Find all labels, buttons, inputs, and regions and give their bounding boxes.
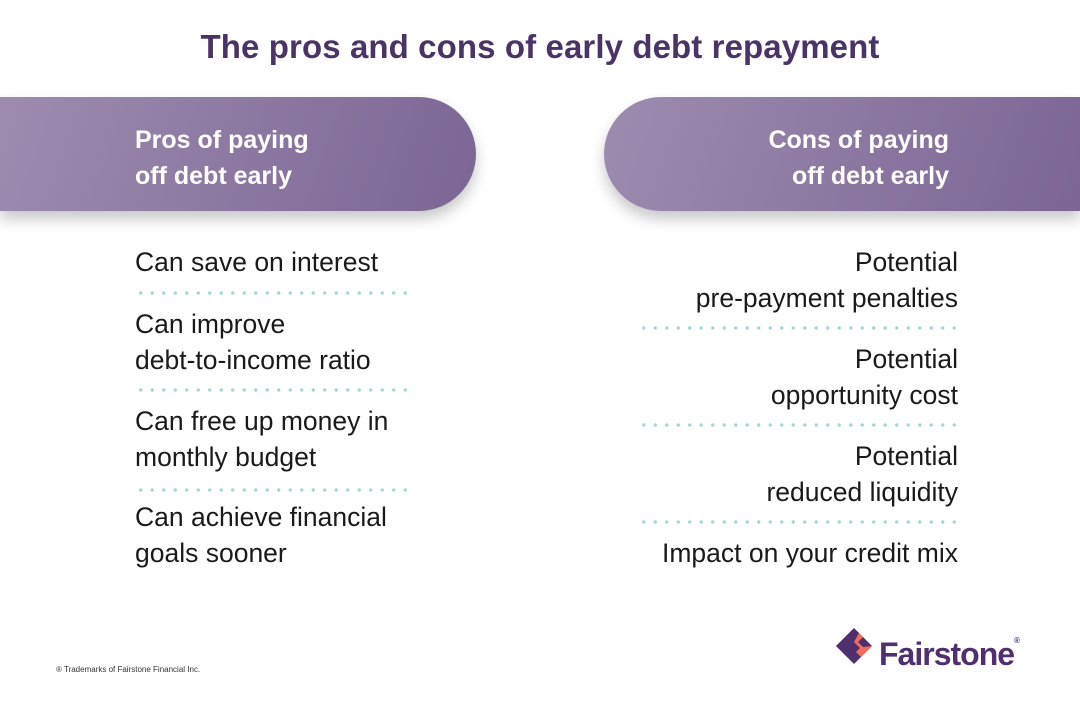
banner: cons: Cons of paying	[768, 126, 949, 154]
pro item 2: Can improve	[135, 309, 285, 339]
icon: diamond	[836, 628, 872, 664]
con item 3: Potential	[855, 441, 958, 471]
con item 1	[696, 247, 958, 313]
con item 2: Potential	[855, 344, 958, 374]
banner: pros: off debt early	[135, 162, 292, 190]
pro item 3: monthly budget	[135, 442, 316, 472]
panel: pros list	[135, 247, 407, 568]
con item 4: Impact on your credit mix	[662, 538, 958, 568]
con item 3: reduced liquidity	[766, 477, 958, 507]
pro item 2	[135, 309, 371, 375]
con item 3	[766, 441, 958, 507]
footnote: ® Trademarks of Fairstone Financial Inc.	[56, 665, 200, 674]
pro item 3: Can free up money in	[135, 406, 388, 436]
pro item 4: goals sooner	[135, 538, 287, 568]
banner: pros	[0, 97, 476, 211]
pro item 4: Can achieve financial	[135, 502, 387, 532]
con item 1: Potential	[855, 247, 958, 277]
con item 1: pre-payment penalties	[696, 283, 958, 313]
pro item 2: debt-to-income ratio	[135, 345, 371, 375]
pro item 3	[135, 406, 388, 472]
pro item 4	[135, 502, 387, 568]
title: The pros and cons of early debt repayment	[201, 28, 879, 65]
logo wordmark: Fairstone®	[879, 636, 1019, 672]
banner: cons	[604, 97, 1080, 211]
con item 2: opportunity cost	[771, 380, 958, 410]
panel: cons list	[642, 247, 958, 568]
banner: pros: Pros of paying	[135, 126, 309, 154]
pro item 1: Can save on interest	[135, 247, 378, 277]
con item 2	[771, 344, 958, 410]
banner: cons: off debt early	[792, 162, 949, 190]
logo: Fairstone	[836, 628, 1020, 672]
